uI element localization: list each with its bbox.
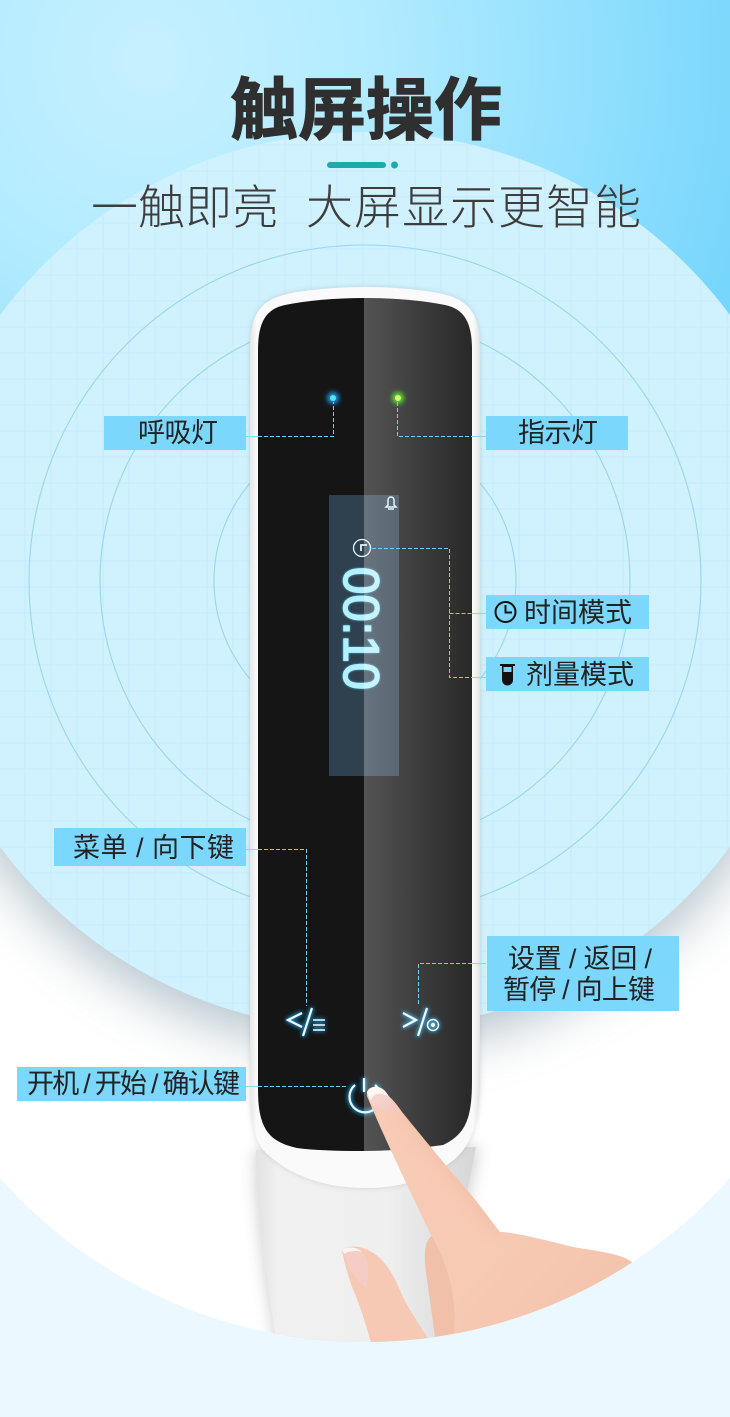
thumb: [342, 1246, 432, 1346]
icon: clock outline: [496, 602, 516, 622]
screen glass sheen: [364, 294, 474, 1154]
breathing light: [327, 392, 339, 404]
label: breathing light: 呼吸灯: [138, 418, 218, 448]
label: dose mode: 剂量模式: [526, 660, 634, 690]
label: indicator light: [486, 416, 628, 450]
icon: clock: [354, 540, 370, 556]
index finger and back of hand: [367, 1089, 640, 1346]
device screen: [256, 294, 474, 1154]
label: breathing light: [104, 416, 246, 450]
divider accent: [327, 162, 398, 168]
label: settings key: [487, 936, 679, 1011]
index finger nail: [367, 1087, 397, 1111]
label: time mode: 时间模式: [524, 598, 632, 628]
leader lines: [246, 402, 486, 1086]
subtitle: [91, 181, 641, 234]
label: indicator light: 指示灯: [518, 418, 598, 448]
label: menu down key: 菜单 / 向下键: [73, 833, 234, 863]
hand: [342, 1087, 640, 1346]
label: settings key: 设置 / 返回 /: [508, 944, 652, 974]
subtitle: 一触即亮: [91, 181, 279, 234]
label: dose mode: [486, 657, 649, 691]
subtitle: 大屏显示更智能: [306, 181, 641, 234]
light blue circle with grid and rings: [0, 132, 730, 1016]
shadow under the light circle: [0, 847, 730, 1065]
label: menu down key: [54, 828, 246, 866]
icon: test tube: [500, 664, 515, 686]
label: power key: 开机 / 开始 / 确认键: [27, 1069, 240, 1099]
icon: menu down key: [288, 1008, 325, 1036]
icon: settings up key: [403, 1008, 438, 1036]
label: time mode: [486, 595, 649, 629]
countdown time: 00:10: [333, 567, 389, 690]
thumb nail tip: [342, 1247, 362, 1254]
label: settings key: 暂停 / 向上键: [503, 975, 655, 1005]
white lower circle: [0, 366, 730, 1342]
icon: bell: [386, 497, 396, 509]
title: 触屏操作: [230, 73, 502, 149]
thumb nail: [342, 1247, 368, 1288]
device body: [250, 287, 480, 1188]
top blue gradient background: [0, 0, 730, 600]
device handle: [256, 1147, 478, 1345]
indicator light: [392, 392, 404, 404]
display window: [329, 495, 399, 776]
curled finger: [425, 1236, 480, 1346]
index nail tip: [367, 1087, 389, 1100]
finger edge shading: [406, 1118, 493, 1223]
icon: power key: [350, 1078, 380, 1112]
